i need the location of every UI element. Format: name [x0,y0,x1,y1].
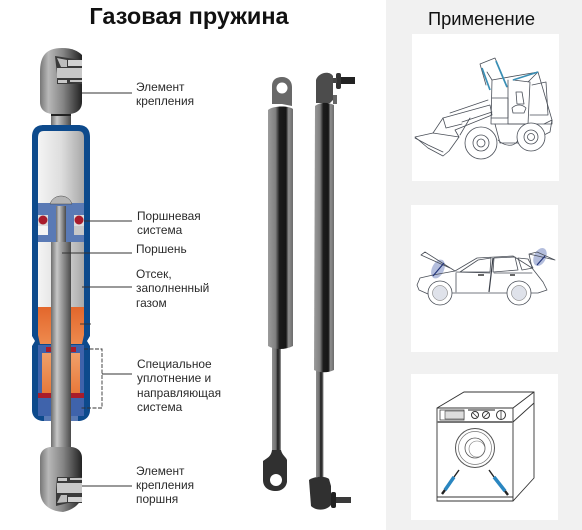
label: piston mounting element: крепления [136,478,194,492]
label: piston: Поршень [136,242,187,256]
label: mounting element: Элемент [136,80,185,94]
heading: applications: Применение [428,8,535,29]
label: gas chamber: газом [136,296,167,310]
label: piston mounting element: Элемент [136,464,185,478]
piston system [38,196,84,244]
photo: gas spring with ball-joint ends [309,73,355,510]
panel: washing machine application [411,374,558,520]
label: gas chamber: заполненный [136,281,209,295]
piston rod [51,242,71,452]
photo: gas spring with eyelet ends [263,77,293,491]
cutaway diagram of gas spring [32,48,90,512]
label: gas chamber [80,267,209,324]
icon: car with open hood and tailgate [417,246,555,305]
gas chamber upper [38,131,84,204]
cylinder shell [32,125,90,421]
orange oil chamber [38,307,84,344]
icon: wheel loader [415,58,552,159]
panel: car application [411,205,558,352]
label: special seal and guide system: Специальное [137,357,212,371]
seal and guide system [38,345,84,421]
label: piston mounting element: поршня [136,492,178,506]
label: mounting element [82,80,194,108]
label: piston system: Поршневая [137,209,201,223]
title: Газовая пружина [89,3,290,29]
label: mounting element: крепления [136,94,194,108]
label: special seal and guide system [80,349,221,414]
top mounting element [40,48,82,126]
label: piston mounting element [82,464,194,506]
label: special seal and guide system: уплотнение и [137,371,211,385]
gas chamber lower [38,242,84,307]
label: piston system [84,209,201,237]
bottom mounting element [40,447,82,512]
label: piston [62,242,187,256]
label: special seal and guide system: направляющая [137,386,221,400]
label: gas chamber: Отсек, [136,267,172,281]
icon: washing machine [437,392,534,501]
panel: wheel loader application [412,34,559,181]
background panel: applications [386,0,582,530]
label: piston system: система [137,223,183,237]
label: special seal and guide system: система [137,400,183,414]
